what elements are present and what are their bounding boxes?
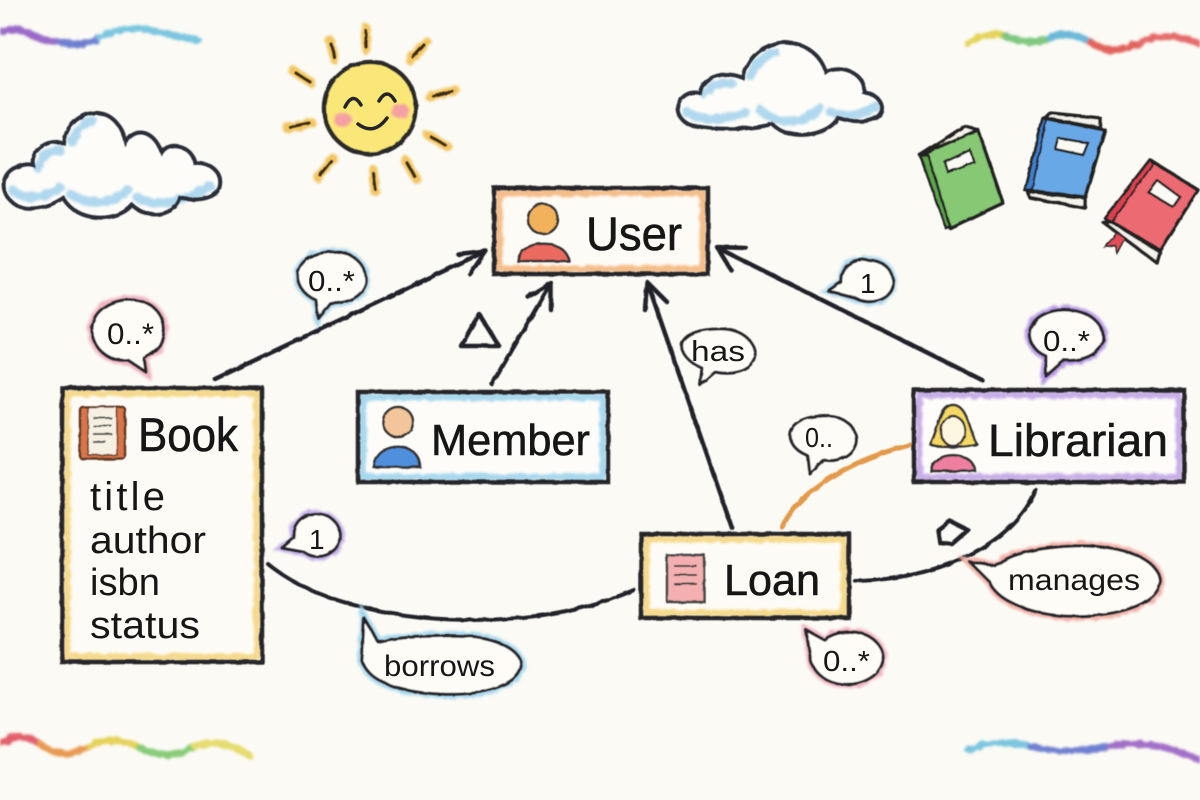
- callout: 0..* top book: 0..*: [107, 318, 154, 351]
- heading: Member: Member: [431, 416, 590, 465]
- callout: has: [682, 329, 755, 385]
- heading: User: User: [586, 207, 682, 260]
- text: attributes: title: [90, 475, 165, 519]
- icon: red book: [1103, 160, 1198, 263]
- panel: librarian: [914, 390, 1184, 482]
- text: attributes: status: [90, 605, 200, 647]
- icon: blue book: [1025, 113, 1105, 208]
- heading: Loan: Loan: [724, 556, 820, 605]
- callout: manages: [970, 546, 1160, 616]
- icon: book: [80, 407, 125, 459]
- callout: 1 user right: [828, 260, 893, 302]
- callout: borrows: [362, 618, 521, 694]
- icon: aggregation diamond: [938, 521, 968, 544]
- connector: loan to librarian manages: [855, 490, 1036, 581]
- decorative rainbow squiggle: top left: [0, 28, 198, 44]
- callout: 0..* top book: [92, 300, 164, 372]
- heading: Librarian: Librarian: [988, 415, 1168, 466]
- text: attributes: author: [90, 520, 206, 562]
- icon: green book: [920, 126, 1003, 228]
- callout: 1 borrow: 1: [309, 524, 325, 555]
- callout: manages: manages: [1008, 564, 1140, 597]
- callout: 0..: 0..: [805, 422, 833, 453]
- callout: 0..* user: 0..*: [308, 266, 355, 298]
- panel: member: [358, 392, 608, 482]
- panel: user: [494, 188, 708, 274]
- connector: loan to librarian orange: [782, 445, 910, 527]
- arrow: loan to user: [645, 282, 732, 528]
- icon: inheritance triangle: [461, 314, 499, 346]
- heading: Book: Book: [138, 408, 238, 461]
- callout: borrows: borrows: [384, 650, 495, 683]
- icon: right cloud: [678, 43, 882, 135]
- decorative rainbow squiggle: bottom right: [968, 743, 1200, 760]
- callout: 0..: [790, 416, 856, 474]
- callout: 0..* librarian: [1030, 310, 1103, 376]
- connector: book to loan borrows: [268, 564, 634, 620]
- callout: 1 borrow: [282, 514, 340, 556]
- decorative rainbow squiggle: top right: [968, 34, 1200, 50]
- icon: user: [518, 204, 569, 261]
- arrow: librarian to user: [717, 247, 982, 380]
- callout: 0..* loan: [806, 630, 883, 684]
- callout: 1 user right: 1: [860, 268, 876, 299]
- text: attributes: isbn: [90, 562, 160, 604]
- decorative rainbow squiggle: bottom left: [0, 737, 250, 756]
- panel: book: [62, 388, 262, 662]
- callout: 0..* user: [298, 252, 366, 318]
- icon: loan: [667, 555, 704, 602]
- icon: left cloud: [4, 113, 220, 218]
- text: attributes: [90, 475, 206, 647]
- callout: has: has: [691, 336, 745, 368]
- arrow: member to user: [492, 283, 551, 384]
- icon: librarian: [930, 405, 977, 471]
- panel: loan: [641, 534, 849, 618]
- icon: member: [374, 407, 420, 467]
- arrow: book to user: [215, 251, 486, 379]
- callout: 0..* loan: 0..*: [823, 646, 870, 678]
- callout: 0..* librarian: 0..*: [1043, 326, 1090, 358]
- icon: sun: [287, 28, 455, 192]
